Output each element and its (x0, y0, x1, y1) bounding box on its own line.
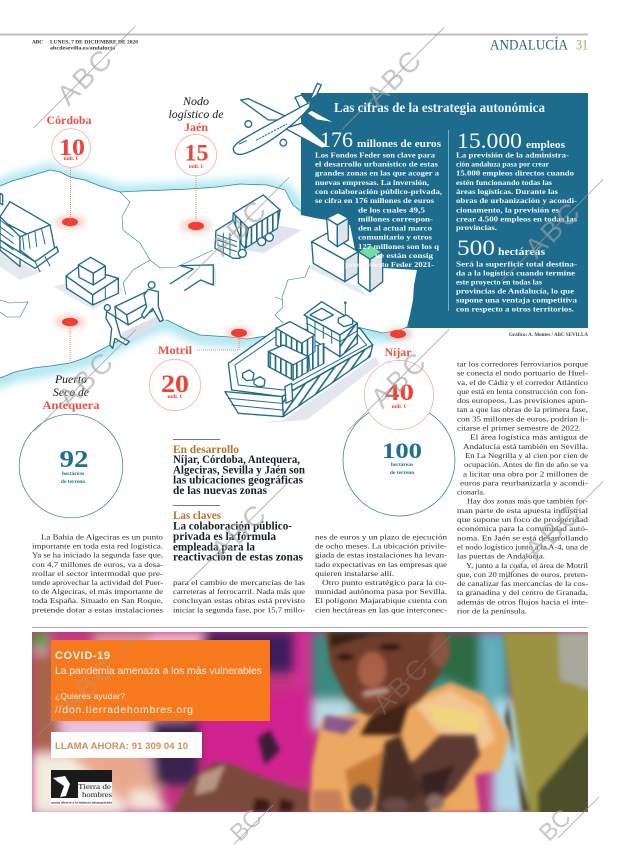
panel text: 176 millones: el desarrollo urbanístico de estas (315, 160, 438, 169)
map of Andalucía (0, 170, 417, 378)
section title: ANDALUCÍA (490, 36, 568, 54)
panel text: 176 millones: 127 millones son los q (358, 242, 440, 251)
panel text: 176 millones: 176 (320, 127, 353, 152)
photo: child face (326, 632, 450, 735)
article column 3 (315, 532, 448, 614)
panel text: 500 hectáreas: provincias de Andalucía, lo que (456, 286, 575, 296)
article column 1: La Bahía de Algeciras es un punto (41, 532, 163, 542)
advert: Tierra de hombres logo: hombres (82, 790, 112, 799)
panel text: 15.000 empleos: estén funcionando todas las (456, 178, 552, 187)
article column 4: que supone un foco de prosperidad (457, 515, 588, 524)
marker: Antequera (54, 314, 86, 330)
article column 4: euros para reurbanizarla y acondi- (460, 478, 589, 487)
article column 4: Hay dos zonas más que también for- (467, 497, 589, 506)
panel text: 500 hectáreas: con respecto a otros territorios. (456, 304, 574, 314)
callout: Antequera 92 hectáreas: de terreno (61, 479, 85, 485)
article column 2: carreteras al ferrocarril. Nada más que (173, 587, 306, 596)
article column 4: rior de la península. (457, 606, 527, 616)
callout: Níjar 40: Níjar (384, 345, 412, 359)
article column 4: que está en lenta construcción con fon- (457, 387, 589, 396)
text block: En desarrollo: Níjar, Córdoba, Antequera, (173, 454, 300, 466)
photo: child shirt (310, 682, 510, 812)
panel text: 500 hectáreas: da a la logística cuando termine (456, 268, 576, 278)
panel text: 176 millones: presupuesto Feder 2021- (345, 260, 435, 269)
callout: Sevilla 100 hectáreas (343, 404, 455, 516)
article column 4: Andalucía está también en Sevilla. (463, 442, 588, 451)
article column 1: Ya se ha iniciado la segunda fase que, (32, 551, 163, 560)
article column 4 (457, 360, 589, 616)
article column 4: dos europeos. Las previsiones apun- (457, 396, 589, 405)
panel text: 15.000 empleos (456, 128, 578, 232)
article column 4: ta granadina y del centro de Granada, (457, 588, 588, 597)
header: date and site (32, 40, 138, 52)
article column 3: quieren instalarse allí. (315, 569, 394, 578)
advert photo (32, 632, 592, 815)
header rule (0, 34, 588, 36)
advert: phone box: LLAMA AHORA: 91 309 04 10 (55, 741, 188, 752)
watermarks: ABC: ABC (519, 197, 586, 264)
callout: Antequera 92 hectáreas (19, 372, 123, 518)
article column 2: iniciar la segunda fase, por 15,7 millo- (173, 605, 306, 614)
panel text: 15.000 empleos: La previsión de la administra- (456, 150, 570, 160)
article column 4: se conecta el nodo portuario de Huel- (457, 369, 589, 378)
callout: Sevilla 100 hectáreas: hectáreas (391, 462, 413, 468)
watermarks: ABC: ABC (52, 347, 119, 414)
text block: Las claves (173, 505, 304, 564)
article column 4: ocupación. Antes de fin de año se va (464, 460, 589, 469)
advert: orange box: ¿Quieres ayudar? (55, 691, 125, 701)
photo: child arms and hands (312, 735, 480, 815)
callout: Antequera 92 hectáreas: Antequera (42, 398, 100, 412)
text: panel title: Las cifras de la estrategia autonómica (334, 101, 545, 116)
watermarks: ABC: ABC (360, 45, 427, 112)
text block: En desarrollo: las ubicaciones geográficas (173, 475, 304, 487)
callout: Córdoba 10 (46, 113, 92, 167)
dotted leader lines (70, 168, 239, 362)
text block: En desarrollo (173, 439, 306, 497)
marker: Córdoba (54, 214, 86, 230)
article column 3: munidad autónoma pasa por Sevilla. (315, 587, 447, 596)
article column 3: nes de euros y un plazo de ejecución (315, 532, 447, 542)
article column 4: El área logística más antigua de (470, 433, 589, 442)
callout: Motril 20: Motril (158, 343, 193, 357)
panel text: 15.000 empleos: crear 4.500 empleos en todas las (456, 214, 577, 224)
article column 4: cionarla. (457, 488, 485, 497)
panel text: 15.000 empleos: áreas logísticas. Durante las (456, 187, 558, 196)
article column 4: tan a que las obras de la primera fase, (457, 405, 588, 414)
credit: Gráfico: A. Montes / ABC SEVILLA (509, 333, 588, 338)
panel text: 15.000 empleos: empleos (526, 139, 566, 151)
article column 4: citarse el primer semestre de 2022. (457, 424, 581, 432)
article column 3: El polígono Majarabique cuenta con (315, 596, 447, 605)
article column 1: importante en toda esta red logística. (32, 542, 163, 551)
watermarks: ABC: ABC (365, 347, 432, 414)
article column 4: el nodo logístico junto a la A-4, una de (457, 542, 589, 552)
article column 4: con 35 millones de euros, podrían li- (457, 414, 589, 423)
text block: Las claves: privada es la fórmula (173, 531, 276, 543)
icon: cargo ship (225, 302, 380, 423)
panel text: 176 millones: den al actual marco (358, 224, 432, 233)
callout: Motril 20: 20 (161, 371, 189, 398)
marker: Motril (225, 326, 253, 340)
text block: En desarrollo: En desarrollo (173, 444, 239, 456)
watermarks: ABC: ABC (205, 195, 272, 262)
article column 4: económica para la comunidad autó- (457, 524, 589, 533)
callout: Jaén 15 (168, 94, 224, 176)
advert: orange box (51, 640, 270, 721)
article column 3: cien hectáreas en las que interconec- (315, 605, 448, 614)
panel text: 176 millones: se cifra en 176 millones de euros (315, 196, 434, 205)
icon: workers carrying a box (104, 282, 167, 348)
icon: stacked boxes (53, 257, 123, 310)
section title: 31 (576, 38, 588, 54)
icon: airplane (233, 83, 337, 154)
advert: phone box (51, 732, 202, 758)
callout: Antequera 92 hectáreas: 92 (60, 447, 88, 473)
icon: truck (215, 195, 302, 258)
panel text: 15.000 empleos: obras de urbanización y acondi- (456, 196, 578, 205)
icon: arrow (170, 265, 216, 291)
article column 4: Y, junto a la costa, el área de Motril (466, 561, 588, 570)
text block: Las claves: reactivación de estas zonas (173, 552, 304, 564)
panel text: 176 millones (315, 127, 442, 269)
article column 1: con 4,7 millones de euros, va a desa- (32, 560, 164, 569)
panel text: 176 millones: comunitario y otros (358, 233, 432, 242)
panel text: 15.000 empleos: cionamento, la previsión es (456, 206, 559, 214)
article column 1: tende aprovechar la actividad del Puer- (32, 578, 164, 587)
watermarks: ABC: ABC (367, 653, 434, 720)
callout: Jaén 15: Nodo (182, 94, 209, 108)
article column 2: concluyan estas obras está previsto (173, 596, 305, 605)
callout: Antequera 92 hectáreas: Puerto (54, 372, 87, 386)
panel text: 176 millones: millones correspon- (358, 214, 434, 224)
panel text: 500 hectáreas: 500 (457, 235, 495, 260)
text block: Las claves: La colaboración público- (173, 521, 292, 533)
callout: Jaén 15: Jaén (184, 120, 208, 134)
article column 3: Otro punto estratégico para la co- (322, 578, 448, 587)
photo: tree trunk (503, 632, 592, 815)
panel text: 15.000 empleos: ción andaluza pasa por crear (456, 160, 550, 169)
article column 4: de canalizar las mercancías de la cos- (457, 579, 589, 588)
watermarks: ABC: ABC (519, 499, 586, 566)
advert: orange box: La pandemia amenaza a los más vulnerables (55, 665, 262, 677)
advert: Tierra de hombres logo: ayuda directa a la infancia desamparada (51, 800, 112, 804)
panel text: 500 hectáreas: hectáreas (498, 246, 546, 258)
panel text: 176 millones: grandes zonas en las que acoger a (315, 169, 439, 178)
panel text: 500 hectáreas: Será la superficie total destina- (456, 260, 578, 268)
article column 1: pretende dotar a estas instalaciones (32, 605, 163, 614)
article column 3: tado expectativas en las empresas que (315, 560, 448, 569)
panel text: 176 millones: millones de euros (357, 138, 442, 150)
panel text: 15.000 empleos: 15.000 (457, 128, 522, 153)
advert: Tierra de hombres logo (51, 770, 112, 805)
text block: Las claves: empleada para la (173, 541, 255, 553)
photo: background foliage and sky (312, 632, 532, 815)
watermarks: ABC: ABC (54, 653, 121, 720)
article column 4: las puertas de Andalucía. (457, 552, 545, 561)
article column 3: de ocho meses. La ubicación privile- (315, 542, 448, 551)
panel text: 176 millones: de los cuales 49,5 (358, 206, 425, 214)
panel text: 500 hectáreas (456, 235, 578, 314)
article column 4: va, el de Cádiz y el corredor Atlántico (457, 378, 588, 387)
panel text: 500 hectáreas: supone una ventaja competitiva (456, 296, 577, 304)
callout: Níjar 40: 40 (385, 380, 414, 405)
icon: train (0, 193, 58, 280)
article column 2 (173, 578, 306, 614)
callout: Níjar 40: mill. € (392, 404, 407, 410)
article column 1: rrollar el sector intermodal que pre- (32, 569, 164, 578)
article column 4: además de otros flujos hacia el inte- (457, 597, 589, 606)
article column 1 (32, 532, 164, 614)
panel text: 500 hectáreas: este proyecto en todas las (456, 278, 542, 286)
article column 4: man parte de esta apuesta industrial (457, 506, 588, 515)
article column 4: que, con 20 millones de euros, preten- (457, 570, 589, 579)
advert: Tierra de hombres logo: Tierra de (78, 782, 112, 791)
panel text: 176 millones: nuevas empresas. La inversión, (315, 178, 429, 187)
callout: Antequera 92 hectáreas: Seco de (53, 385, 90, 399)
article column 4: En La Negrilla y al cien por cien de (465, 451, 589, 460)
panel text: 176 millones: con colaboración público-privada, (315, 187, 442, 196)
photo: hand (172, 730, 312, 812)
article column 4: tar los corredores ferroviarios porque (457, 360, 589, 368)
panel text: 15.000 empleos: 15.000 empleos directos cuando (456, 169, 574, 178)
watermarks: ABC: ABC (205, 499, 272, 566)
advert: orange box: //don.tierradehombres.org (55, 704, 193, 716)
watermarks: ABC: ABC (51, 44, 118, 111)
header: date and site: LUNES, 7 DE DICIEMBRE DE 2020 (50, 40, 138, 46)
map glow (0, 170, 407, 381)
article column 1: toda España. Situado en San Roque, (32, 596, 163, 605)
article column 3: giada de estas instalaciones ha levan- (315, 551, 448, 560)
text block: Las claves: Las claves (173, 510, 222, 522)
text block: En desarrollo: Algeciras, Sevilla y Jaén son (173, 464, 306, 476)
text block: En desarrollo: de las nuevas zonas (173, 485, 268, 497)
callout: Córdoba 10: Córdoba (46, 113, 92, 127)
panel: blue background (301, 93, 588, 328)
article column 4: noma. En Jaén se está desarrollando (457, 533, 588, 542)
photo: blurred woman on the left (32, 632, 312, 815)
callout: Córdoba 10: 10 (59, 135, 85, 160)
watermarks: ABC: BC (225, 804, 268, 846)
panel text: 15.000 empleos: provincias. (456, 223, 497, 232)
marker: Jaén (180, 218, 212, 234)
icon: buildings (310, 213, 383, 297)
callout: Sevilla 100 hectáreas: 100 (382, 438, 422, 463)
callout: Níjar 40 (364, 345, 434, 430)
panel text: 176 millones: ue están consig (375, 251, 433, 260)
callout: Jaén 15: 15 (184, 140, 208, 166)
rule above advert (32, 627, 588, 628)
callout: Córdoba 10: mill. € (64, 156, 79, 162)
divider (447, 130, 450, 311)
article column 1: to de Algeciras, el más importante de (32, 587, 164, 596)
callout: Jaén 15: logístico de (168, 107, 224, 121)
advert: orange box: COVID-19 (55, 650, 110, 662)
callout: Motril 20: mill. € (168, 394, 183, 400)
callout: Jaén 15: mill. € (189, 164, 204, 170)
callout: Antequera 92 hectáreas: hectáreas (62, 471, 84, 477)
panel text: 176 millones: Los Fondos Feder son clave para (315, 150, 435, 160)
callout: Motril 20 (149, 343, 201, 411)
header: date and site: abcdesevilla.es/andalucia (50, 46, 115, 52)
marker: Níjar (384, 327, 412, 341)
article column 2: para el cambio de mercancías de las (173, 578, 305, 587)
header: date and site: ABC (32, 40, 43, 46)
article column 4: a licitar una obra por 2 millones de (463, 469, 589, 478)
watermarks: ABC: BC (534, 804, 577, 846)
callout: Sevilla 100 hectáreas: de terreno (390, 470, 414, 476)
